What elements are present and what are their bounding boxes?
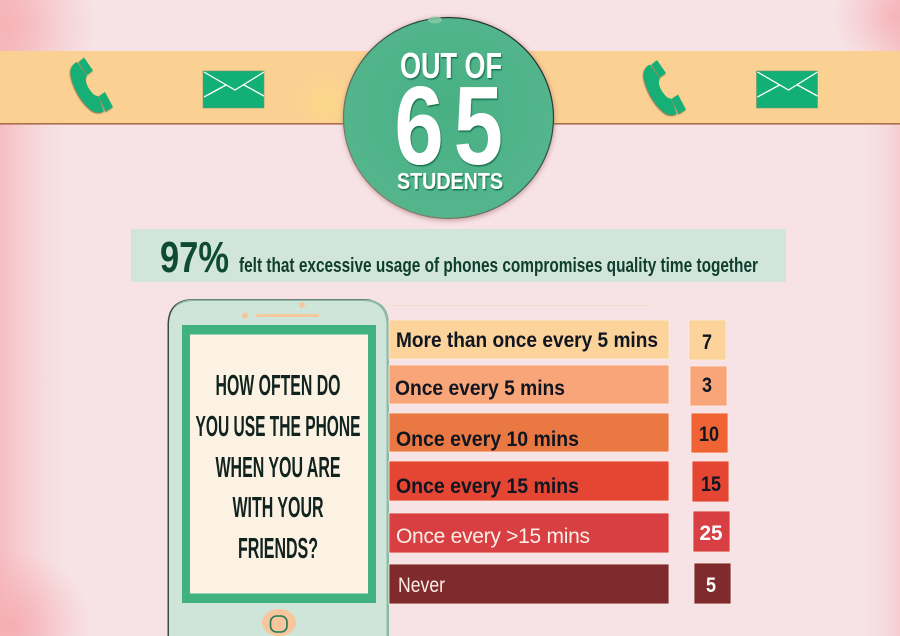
question text: HOW OFTEN DO <box>216 370 340 402</box>
value: 5 <box>694 563 731 604</box>
value: 7 <box>689 320 726 360</box>
bar: never: Never <box>398 574 445 597</box>
question text: YOU USE THE PHONE <box>196 411 360 443</box>
statistic description: felt that excessive usage of phones compromises quality time together <box>239 255 758 277</box>
bar: more than once every 5 mins: More than once every 5 mins <box>396 329 658 352</box>
value: 15: 15 <box>701 473 721 496</box>
icon: phone left <box>70 58 113 113</box>
phone screen <box>182 325 376 603</box>
smartphone illustration <box>168 299 389 636</box>
phone home button <box>262 609 296 636</box>
question text: FRIENDS? <box>238 533 318 565</box>
bar: more than once every 5 mins <box>389 320 669 359</box>
icon: envelope left <box>203 71 264 108</box>
value: 10: 10 <box>699 423 719 446</box>
icon: phone right <box>643 60 686 115</box>
value: 25: 25 <box>700 522 723 545</box>
value: 5: 5 <box>706 574 716 597</box>
bar: once every 15 mins <box>389 461 669 501</box>
header band <box>0 51 900 125</box>
badge: out of 65 students <box>343 16 555 221</box>
value: 3 <box>690 366 727 406</box>
badge text: students: STUDENTS <box>397 168 503 194</box>
bar: once every >15 mins: Once every >15 mins <box>396 525 590 548</box>
value: 10 <box>691 413 728 453</box>
phone speaker <box>256 314 319 317</box>
badge number: 65: 6 <box>394 65 444 188</box>
statistic value: 97% <box>160 233 229 282</box>
question text: WITH YOUR <box>232 492 324 524</box>
bar: once every >15 mins <box>389 513 669 553</box>
value: 3: 3 <box>702 374 712 397</box>
bar: once every 10 mins <box>389 413 669 452</box>
value: 25 <box>693 511 730 552</box>
bar: once every 15 mins: Once every 15 mins <box>396 475 579 498</box>
badge number: 65: 5 <box>454 65 503 188</box>
icon: envelope right <box>756 71 818 108</box>
badge text: out of: OUT OF <box>400 45 502 86</box>
question text <box>196 370 360 565</box>
bar: once every 5 mins <box>389 365 669 404</box>
value: 15 <box>692 461 729 502</box>
bar: once every 5 mins: Once every 5 mins <box>395 377 565 400</box>
statistic strip: 97% <box>131 229 786 282</box>
phone camera dots <box>242 302 305 318</box>
question text: WHEN YOU ARE <box>216 452 340 484</box>
value: 7: 7 <box>702 331 712 354</box>
value boxes <box>689 320 731 604</box>
bar chart: phone use frequency <box>389 305 669 604</box>
bar: once every 10 mins: Once every 10 mins <box>396 428 579 451</box>
bar: never <box>389 564 669 604</box>
